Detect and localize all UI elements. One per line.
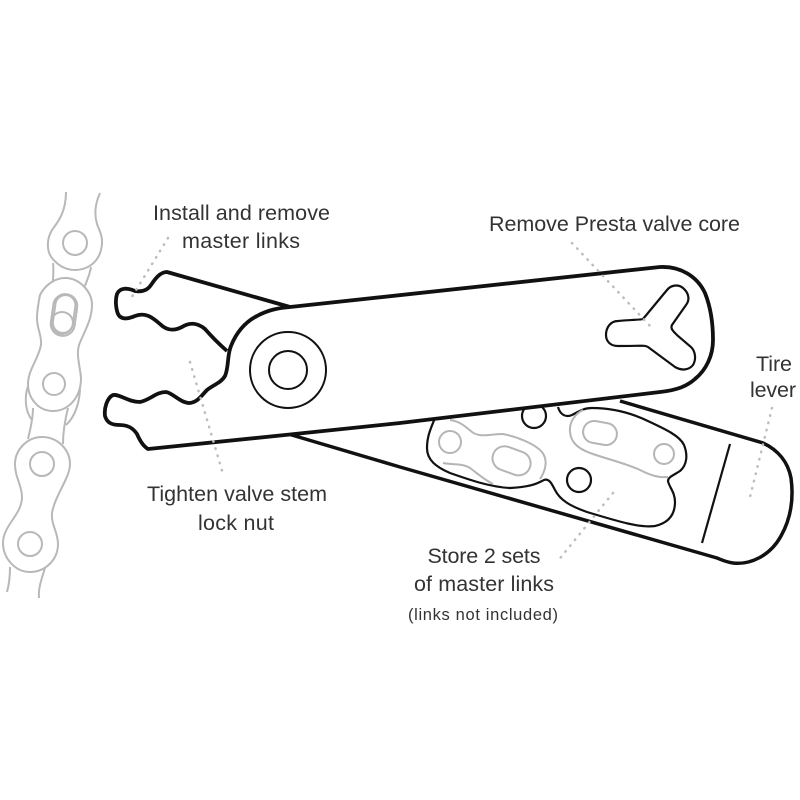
handle body (105, 267, 713, 449)
label: tighten valve stem lock nut: Tighten valve stem (147, 482, 327, 506)
chain illustration (3, 192, 102, 598)
Y-shaped valve core slot (606, 286, 695, 369)
label: tighten valve stem lock nut: lock nut (198, 511, 274, 535)
label: install and remove master links: master links (182, 229, 300, 253)
upper jaw (116, 272, 290, 351)
label: tire lever: lever (750, 378, 796, 402)
stored master links (439, 410, 674, 484)
label: remove Presta valve core: Remove Presta valve core (489, 212, 740, 236)
label: install and remove master links: Install and remove (153, 201, 330, 225)
dotted leader lines (130, 238, 772, 562)
label: store 2 sets of master links: (links not included) (408, 606, 558, 624)
link storage cavity (427, 404, 730, 543)
label: tire lever: Tire (756, 352, 792, 376)
label: tire lever (750, 352, 796, 402)
upper handle and jaws (105, 267, 713, 449)
label: store 2 sets of master links: of master links (414, 572, 554, 596)
lower handle with tire lever (285, 401, 792, 563)
label: store 2 sets of master links (408, 544, 558, 624)
pivot rivet (250, 332, 326, 408)
label: store 2 sets of master links: Store 2 sets (428, 544, 540, 568)
label: install and remove master links (153, 201, 330, 253)
label: tighten valve stem lock nut (147, 482, 327, 535)
